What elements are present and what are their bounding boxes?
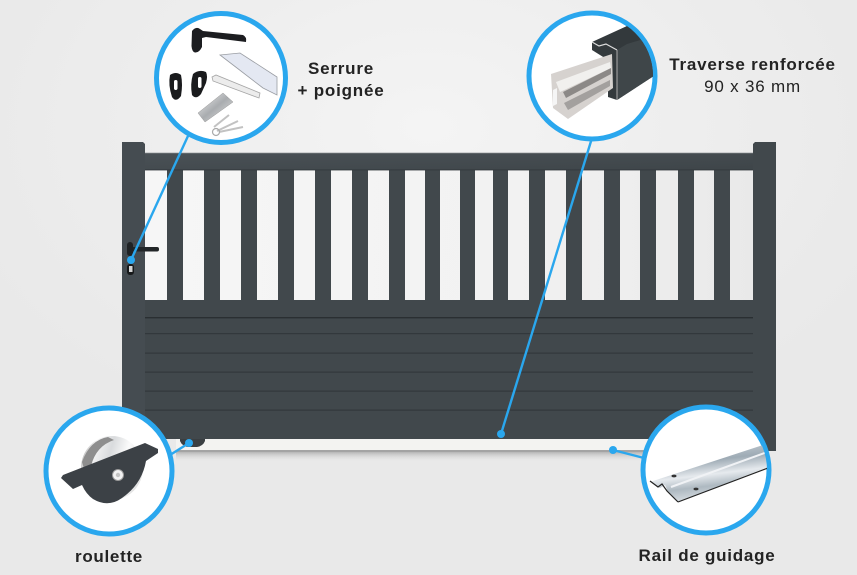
label: reinforced crossbar xyxy=(669,55,836,96)
keys xyxy=(214,115,243,132)
label: roller: roulette xyxy=(75,547,143,566)
escutcheon right xyxy=(191,71,207,97)
hub xyxy=(112,470,124,480)
dark profile xyxy=(592,26,653,100)
gate infill behind slats xyxy=(145,170,753,300)
mortise lock xyxy=(220,53,277,95)
chrome wheel xyxy=(81,436,143,500)
top rail xyxy=(145,153,753,170)
guide rail on the ground xyxy=(176,439,756,462)
solid lower panel xyxy=(145,300,753,439)
sliding gate xyxy=(122,142,776,451)
dark bracket xyxy=(61,443,158,503)
gate handle and lock xyxy=(127,242,159,275)
left post xyxy=(122,142,145,451)
icon: reinforced crossbar circle xyxy=(529,13,660,139)
roller under gate xyxy=(180,439,205,447)
icon: roller wheel circle xyxy=(46,408,172,534)
label: reinforced crossbar: 90 x 36 mm xyxy=(704,77,801,96)
callout line: roller xyxy=(170,439,193,455)
right post xyxy=(753,142,776,451)
label: reinforced crossbar: Traverse renforcée xyxy=(669,55,836,74)
callout line: guide rail xyxy=(609,446,644,458)
vertical slats xyxy=(167,170,730,300)
escutcheon left xyxy=(169,73,182,100)
label: guide rail: Rail de guidage xyxy=(639,546,775,565)
handle xyxy=(192,28,246,53)
label: lock: Serrure xyxy=(308,59,374,78)
strike plate xyxy=(212,75,260,98)
icon: lock and handle circle xyxy=(156,14,286,142)
label: lock: + poignée xyxy=(297,81,385,100)
callout line: reinforced rail xyxy=(497,138,592,438)
callout line: lock xyxy=(127,136,188,264)
icon: guide rail circle xyxy=(643,407,776,533)
label: lock xyxy=(297,59,385,100)
aluminium insert xyxy=(551,54,613,119)
cylinder xyxy=(198,93,233,122)
rail profile xyxy=(650,445,767,502)
